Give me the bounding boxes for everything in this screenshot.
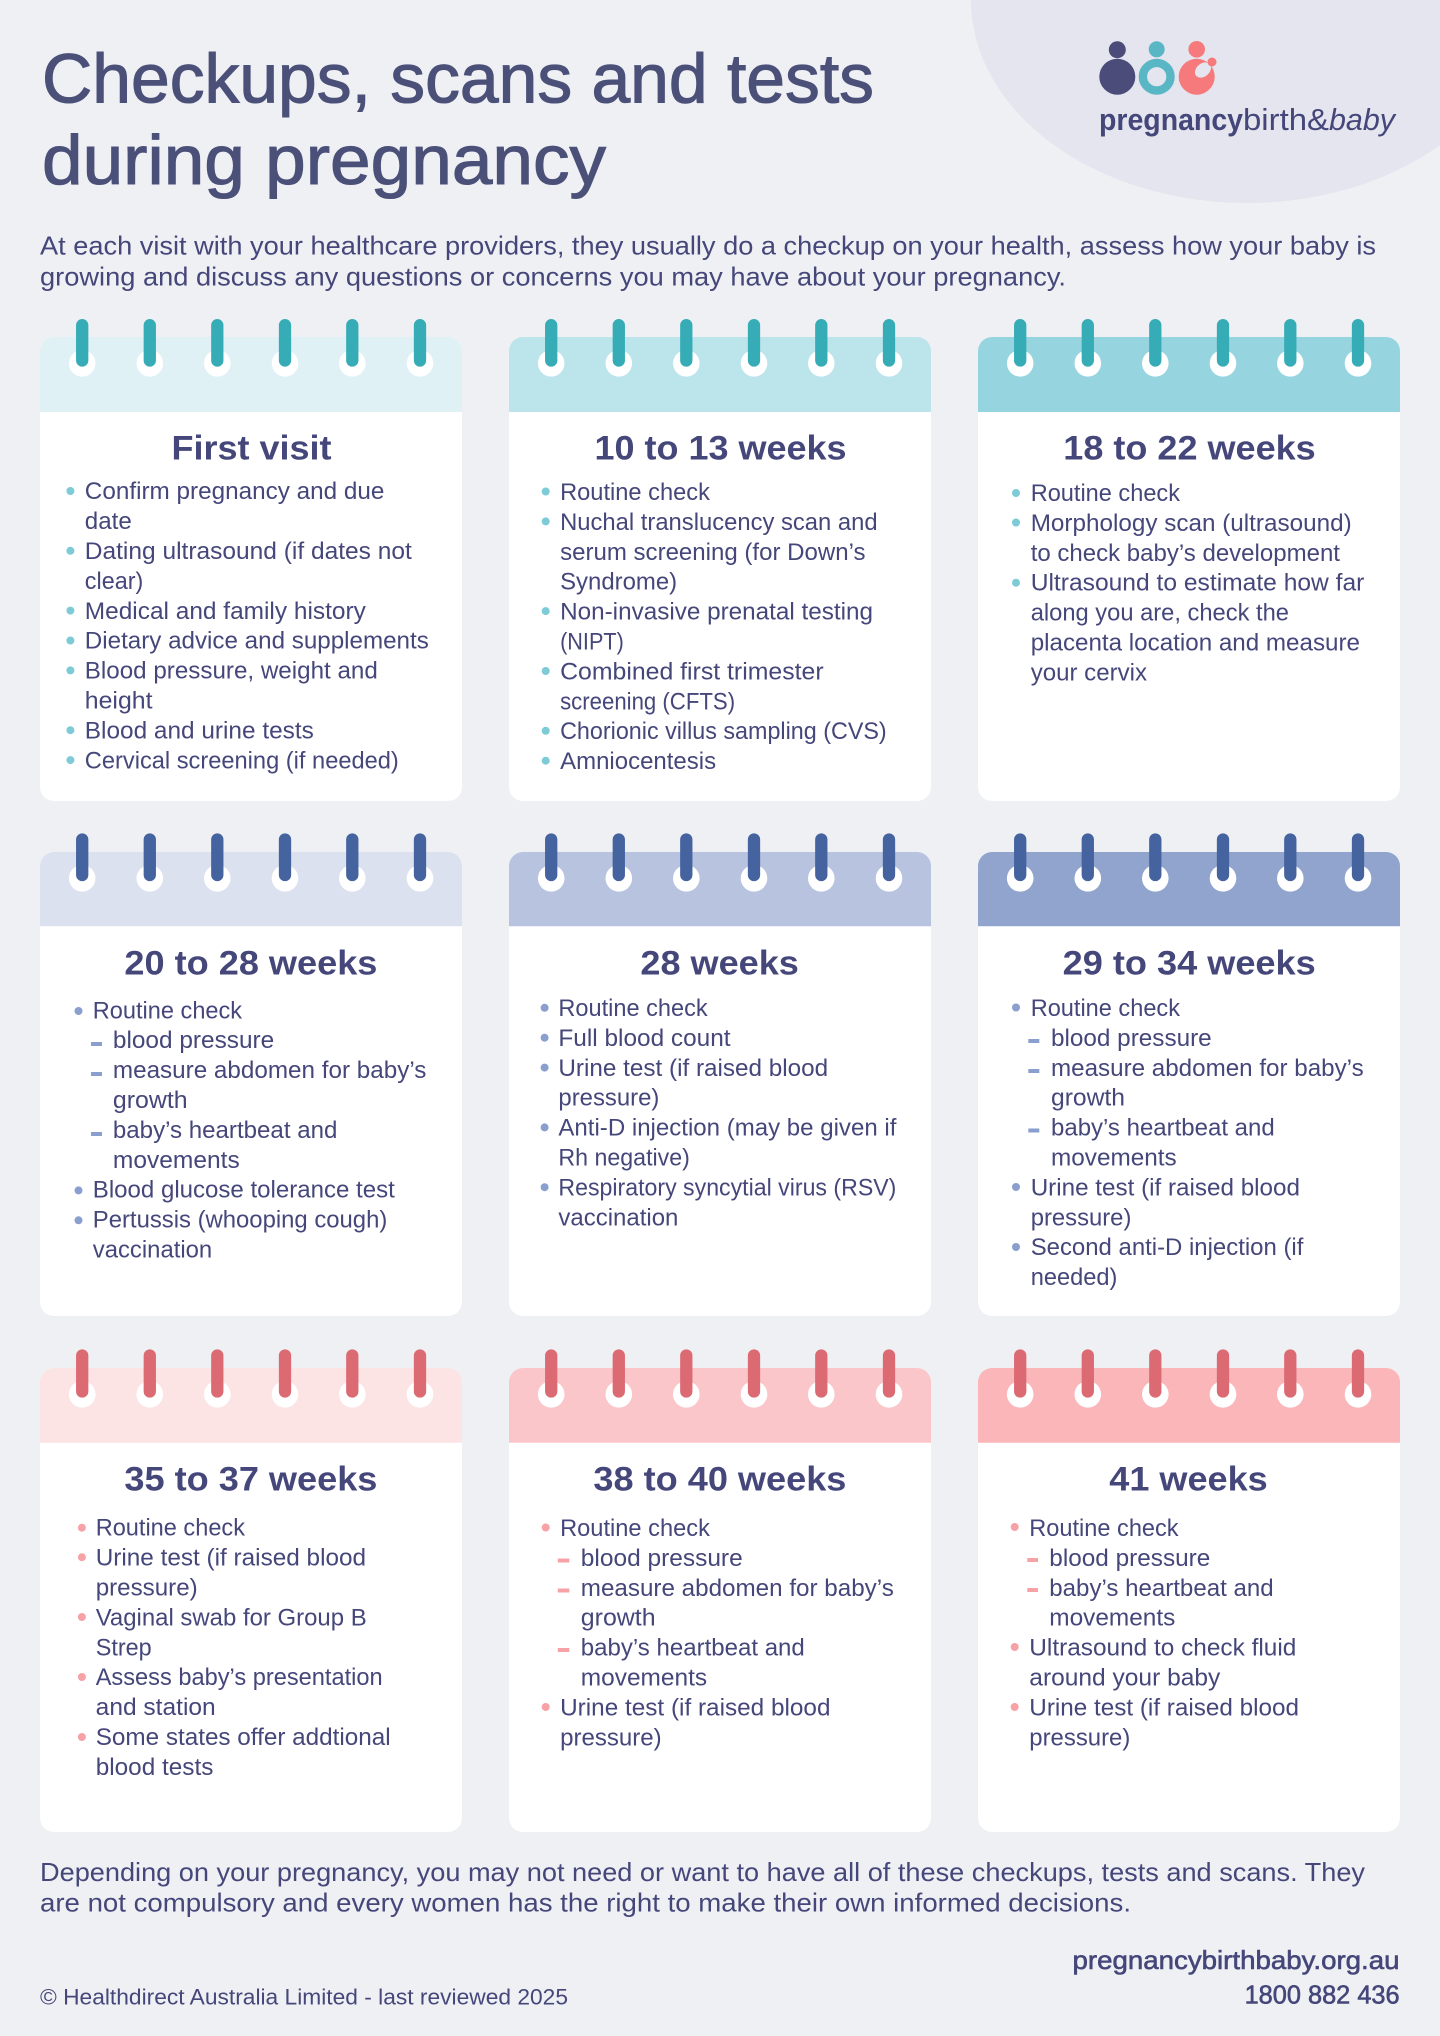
binder rings [538, 1356, 902, 1408]
list: 10 to 13 weeks checks: Non-invasive prenatal testing [560, 599, 873, 626]
list: 35 to 37 weeks checks: Some states offer addtional [96, 1724, 391, 1751]
list: 38 to 40 weeks checks: movements [581, 1664, 707, 1692]
list: 28 weeks checks: Routine check [558, 995, 708, 1022]
list: 28 weeks checks: Urine test (if raised blood [558, 1055, 828, 1082]
list: first visit checks: Cervical screening (if needed) [85, 747, 399, 774]
list: 35 to 37 weeks checks: blood tests [96, 1754, 213, 1781]
list: 18 to 22 weeks checks: placenta location and measure [1031, 630, 1360, 656]
heading: 28 weeks: 28 weeks [640, 944, 799, 982]
list: 18 to 22 weeks checks [1012, 480, 1364, 686]
binder rings [538, 325, 902, 377]
panel: 28 weeks [509, 840, 931, 1316]
list: first visit checks: Dietary advice and supplements [85, 628, 429, 655]
list: 41 weeks checks: movements [1049, 1605, 1175, 1632]
list: 38 to 40 weeks checks: Urine test (if raised blood [560, 1694, 830, 1721]
decorative corner blob behind logo [971, 0, 1440, 203]
list: 29 to 34 weeks checks: movements [1051, 1144, 1177, 1172]
list: first visit checks: height [85, 688, 153, 714]
list: 28 weeks checks: Rh negative) [558, 1144, 690, 1172]
footer note [40, 1857, 1365, 1918]
list: 20 to 28 weeks checks: growth [113, 1087, 188, 1114]
list: 38 to 40 weeks checks: pressure) [560, 1724, 662, 1751]
list: 35 to 37 weeks checks: Assess baby’s presentation [96, 1664, 383, 1691]
list: 20 to 28 weeks checks: Pertussis (whooping cough) [93, 1207, 387, 1234]
binder rings [69, 325, 433, 377]
heading: 18 to 22 weeks: 18 to 22 weeks [1063, 430, 1316, 468]
list: 20 to 28 weeks checks: Blood glucose tolerance test [93, 1177, 395, 1204]
list: first visit checks: clear) [85, 568, 143, 595]
panel: 29 to 34 weeks [978, 840, 1400, 1316]
list: 28 weeks checks [541, 995, 897, 1231]
list: 38 to 40 weeks checks: blood pressure [581, 1545, 743, 1572]
list: 29 to 34 weeks checks: baby’s heartbeat and [1051, 1115, 1275, 1142]
list: 41 weeks checks [1011, 1515, 1299, 1751]
list: 29 to 34 weeks checks: blood pressure [1051, 1025, 1212, 1052]
list: 38 to 40 weeks checks: Routine check [560, 1515, 711, 1542]
list: 29 to 34 weeks checks: Second anti-D injection (if [1031, 1234, 1304, 1261]
list: 29 to 34 weeks checks: Routine check [1031, 995, 1181, 1022]
list: 10 to 13 weeks checks: serum screening (for Down’s [560, 539, 866, 566]
list: 28 weeks checks: Respiratory syncytial virus (RSV) [558, 1174, 896, 1201]
list: 28 weeks checks: Full blood count [558, 1025, 731, 1052]
website and phone: 1800 882 436 [1245, 1980, 1400, 2010]
list: 18 to 22 weeks checks: your cervix [1031, 659, 1147, 686]
list: 38 to 40 weeks checks: growth [581, 1605, 656, 1632]
list: first visit checks: Medical and family history [85, 598, 367, 625]
list: 38 to 40 weeks checks: measure abdomen for baby’s [581, 1575, 894, 1602]
heading: 41 weeks: 41 weeks [1109, 1461, 1268, 1499]
panel: 18 to 22 weeks [978, 325, 1400, 801]
list: 10 to 13 weeks checks [542, 479, 887, 775]
list: 10 to 13 weeks checks: Amniocentesis [560, 748, 716, 775]
binder rings [1007, 1356, 1371, 1408]
intro paragraph [40, 231, 1376, 292]
list: 18 to 22 weeks checks: Routine check [1031, 480, 1181, 507]
list: 41 weeks checks: blood pressure [1049, 1545, 1210, 1572]
list: 18 to 22 weeks checks: to check baby’s development [1031, 540, 1340, 567]
footer note: are not compulsory and every women has the right to make their own informed decisions. [40, 1888, 1131, 1918]
list: 10 to 13 weeks checks: Chorionic villus sampling (CVS) [560, 718, 887, 745]
list: 20 to 28 weeks checks: measure abdomen for baby’s [113, 1057, 426, 1084]
title: during pregnancy [42, 121, 606, 199]
title [42, 39, 874, 199]
logo: pregnancybirth&baby [1099, 41, 1397, 137]
binder rings [69, 1356, 433, 1408]
list: first visit checks: Blood and urine tests [85, 717, 314, 744]
intro paragraph: growing and discuss any questions or concerns you may have about your pregnancy. [40, 262, 1066, 292]
list: 20 to 28 weeks checks: Routine check [93, 997, 243, 1024]
heading: 10 to 13 weeks: 10 to 13 weeks [594, 430, 846, 468]
intro paragraph: At each visit with your healthcare providers, they usually do a checkup on your health, assess how your baby is [40, 231, 1376, 261]
list: 29 to 34 weeks checks: pressure) [1031, 1204, 1131, 1231]
logo: pregnancybirth&baby: baby [1329, 102, 1397, 137]
list: 41 weeks checks: Routine check [1029, 1515, 1179, 1542]
list: 28 weeks checks: pressure) [558, 1085, 659, 1112]
heading: 20 to 28 weeks: 20 to 28 weeks [124, 944, 377, 982]
binder rings [69, 840, 433, 892]
list: 38 to 40 weeks checks [542, 1515, 894, 1751]
list: 35 to 37 weeks checks: Routine check [96, 1515, 246, 1542]
list: 41 weeks checks: baby’s heartbeat and [1049, 1575, 1274, 1602]
list: first visit checks: Confirm pregnancy and due [85, 478, 384, 505]
panel: 41 weeks [978, 1356, 1400, 1832]
list: 29 to 34 weeks checks: Urine test (if raised blood [1031, 1174, 1300, 1201]
heading: 38 to 40 weeks: 38 to 40 weeks [593, 1461, 846, 1499]
website and phone: pregnancybirthbaby.org.au [1072, 1945, 1400, 1975]
list: 18 to 22 weeks checks: Ultrasound to estimate how far [1031, 570, 1364, 597]
list: 29 to 34 weeks checks: measure abdomen for baby’s [1051, 1055, 1364, 1082]
list: 10 to 13 weeks checks: screening (CFTS) [560, 688, 735, 715]
heading: 29 to 34 weeks: 29 to 34 weeks [1063, 944, 1316, 982]
list: first visit checks: Dating ultrasound (if dates not [85, 538, 412, 565]
list: 28 weeks checks: Anti-D injection (may be given if [558, 1115, 897, 1142]
list: 41 weeks checks: Ultrasound to check fluid [1029, 1635, 1296, 1662]
title: Checkups, scans and tests [42, 39, 874, 117]
list: 29 to 34 weeks checks [1012, 995, 1364, 1291]
list: 10 to 13 weeks checks: Nuchal translucency scan and [560, 509, 878, 536]
list: 20 to 28 weeks checks: blood pressure [113, 1027, 274, 1054]
website and phone [1072, 1945, 1400, 2010]
list: first visit checks: date [85, 508, 132, 535]
list: 35 to 37 weeks checks [78, 1515, 391, 1781]
binder rings [538, 840, 902, 892]
list: first visit checks [66, 478, 429, 774]
list: 20 to 28 weeks checks: movements [113, 1147, 240, 1174]
list: 28 weeks checks: vaccination [558, 1204, 678, 1231]
list: 10 to 13 weeks checks: Combined first trimester [560, 658, 824, 685]
list: 41 weeks checks: Urine test (if raised blood [1029, 1694, 1299, 1721]
copyright: © Healthdirect Australia Limited - last reviewed 2025 [40, 1984, 568, 2009]
logo: pregnancybirth&baby: pregnancy [1099, 102, 1244, 137]
binder rings [1007, 840, 1371, 892]
list: 35 to 37 weeks checks: Urine test (if raised blood [96, 1545, 366, 1572]
list: 35 to 37 weeks checks: Strep [96, 1634, 152, 1661]
list: 18 to 22 weeks checks: Morphology scan (ultrasound) [1031, 510, 1352, 537]
list: 20 to 28 weeks checks: vaccination [93, 1236, 212, 1264]
list: 35 to 37 weeks checks: Vaginal swab for Group B [96, 1604, 367, 1631]
list: 10 to 13 weeks checks: (NIPT) [560, 628, 624, 656]
list: 38 to 40 weeks checks: baby’s heartbeat and [581, 1635, 805, 1662]
panel: 10 to 13 weeks [509, 325, 931, 801]
list: 20 to 28 weeks checks [74, 997, 426, 1264]
panel: 35 to 37 weeks [40, 1356, 462, 1832]
logo: pregnancybirth&baby: birth& [1243, 102, 1329, 137]
list: 18 to 22 weeks checks: along you are, check the [1031, 600, 1289, 627]
panel: 20 to 28 weeks [40, 840, 462, 1316]
list: 35 to 37 weeks checks: pressure) [96, 1574, 198, 1602]
heading: 35 to 37 weeks: 35 to 37 weeks [124, 1461, 377, 1499]
panel: 38 to 40 weeks [509, 1356, 931, 1832]
list: 41 weeks checks: pressure) [1029, 1724, 1130, 1751]
list: 10 to 13 weeks checks: Syndrome) [560, 569, 677, 596]
list: 35 to 37 weeks checks: and station [96, 1694, 216, 1721]
heading: First visit: First visit [172, 430, 332, 468]
footer note: Depending on your pregnancy, you may not need or want to have all of these checkups, tests and scans. They [40, 1857, 1365, 1887]
list: 20 to 28 weeks checks: baby’s heartbeat and [113, 1117, 337, 1144]
list: first visit checks: Blood pressure, weight and [85, 658, 378, 685]
list: 29 to 34 weeks checks: needed) [1031, 1264, 1117, 1291]
list: 41 weeks checks: around your baby [1029, 1664, 1221, 1692]
binder rings [1007, 325, 1371, 377]
list: 29 to 34 weeks checks: growth [1051, 1085, 1125, 1112]
panel: First visit [40, 325, 462, 801]
list: 10 to 13 weeks checks: Routine check [560, 479, 711, 506]
